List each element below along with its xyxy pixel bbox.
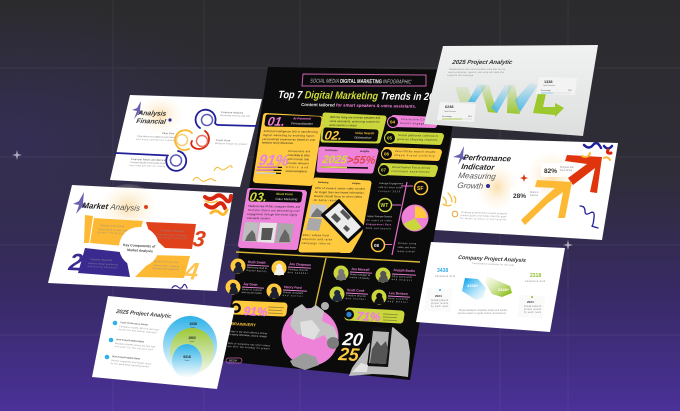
slide captions: Track inflows and outflows to plan ahead (137, 135, 176, 139)
slide: company project analysis: Performance summary for the year (472, 262, 514, 267)
block 3: red with digit: Evaluate rivals, strengths (157, 233, 188, 238)
poster footer text: Brainivery: 96% of marketers say short videos (228, 342, 271, 348)
timeline: statistics column: Engagement Rate (366, 223, 392, 226)
card 2024 (424, 288, 452, 312)
card 01: AI personalization: Consumers are (288, 149, 311, 153)
speaker Jay Dean: Jay Dean (243, 282, 258, 287)
card 2024: Annual review of (431, 299, 448, 302)
zigzag arrow chart (455, 83, 564, 117)
caption (458, 309, 508, 315)
gear red (191, 131, 209, 149)
description text: Tracking performance reveals progress (461, 211, 508, 215)
bullet list: Yearly Performance Market (120, 321, 149, 327)
block 4: yellow with digit: 4 (182, 258, 200, 286)
card: yellow engagement panel (301, 180, 369, 253)
trend pill 07: 07 (381, 168, 387, 173)
card: 2025 statistic: Insights (360, 150, 370, 153)
trend pill 04: Interactive Content (401, 117, 434, 122)
block 1: yellow with digit: Industry and Trends (100, 224, 125, 228)
stat 28% (510, 188, 540, 201)
trend pill 06: Zero-Clicks search results (395, 149, 436, 154)
stat 3438 (435, 268, 456, 278)
slide captions: Compare liquidity and leverage across (130, 161, 167, 165)
bullet list: Semi-Annual Analytics Market (112, 355, 141, 361)
slide captions: Financial Ratios and Metrics (131, 158, 166, 162)
card 01: AI personalization: 91% (257, 152, 290, 169)
speakers: right team (330, 266, 416, 304)
speaker Ruth Smith: Ruth Smith (248, 260, 266, 265)
card 01: AI personalization: digital marketing by enabling hyper- (263, 133, 316, 138)
speaker Scott Cook (330, 286, 368, 302)
card 2024 right: Annual review of (524, 305, 541, 308)
poster header pill: SOCIAL MEDIA DIGITAL MARKETING INFOGRAPHIC (310, 78, 412, 86)
trend pill 05: grow as shopping channels (397, 137, 438, 142)
trend pill 04: boosts engagement (400, 121, 433, 126)
year 2025 text: 20 (340, 329, 364, 350)
timeline: statistics column (365, 182, 428, 255)
block 3: red with digit (146, 222, 208, 252)
concentric rings chart: Sales (190, 327, 196, 329)
card 03: short form video marketing (241, 190, 304, 247)
speaker Jon Morcell: media company (349, 277, 370, 280)
poster footer text: Brainivery: MEDIA (229, 358, 237, 362)
block 2: navy with digit: 2 (66, 249, 85, 277)
speaker Henry Ford: Growth consultant (283, 291, 304, 295)
gear yellow (175, 130, 192, 150)
card 01: AI personalization (256, 115, 320, 183)
speaker Joseph Bartin: SEO specialist (392, 275, 413, 279)
concentric rings chart: Sales (189, 341, 195, 343)
card 2024: by each team (431, 305, 448, 308)
card 02: voice search optimization: Voice Search (355, 131, 375, 135)
bullet list: Review segments and target reach (111, 359, 152, 366)
timeline: statistics column: 2025 and beyond (365, 228, 391, 230)
year 2025 text: 25 (336, 344, 361, 365)
trend pill 06 (382, 148, 439, 160)
concentric rings chart: 1938 (189, 322, 197, 326)
stat card 1338: Total Revenue (543, 84, 555, 87)
poster footer text: Brainivery (226, 321, 271, 363)
card 2024 right: by each team (524, 311, 541, 314)
speaker Scott Cook: and founder (345, 297, 366, 301)
card: yellow engagement panel: Brands should focus on short videos (314, 194, 363, 199)
card 01: AI personalization: more likely to shop (287, 153, 310, 157)
card: yellow engagement panel: 80% of viewers retain video content (315, 186, 366, 191)
caption: Project analysis compares scope and results (459, 309, 508, 312)
decorative squiggles (443, 143, 612, 228)
timeline: statistics column: for users on video (366, 219, 393, 222)
green shape (485, 276, 512, 297)
slide title (136, 110, 172, 126)
timeline: statistics column: rate for short video (378, 186, 404, 189)
poster subtitle: Content tailored for smart speakers & voice assistants. (301, 102, 416, 109)
speaker Jon Chapman: Jon Chapman (289, 262, 311, 267)
slide title: 2025 Project Analytic (115, 309, 172, 320)
slide captions: reporting periods for clarity (129, 164, 166, 168)
speaker Joseph Bartin (376, 268, 416, 282)
bullet list: across the key market channels (118, 328, 158, 334)
block 4: yellow with digit: Stakeholders shaping (153, 264, 180, 268)
card 01: AI personalization: AI-Powered (293, 117, 311, 121)
decorative squiggles (193, 166, 232, 181)
speaker Lee Benson (372, 290, 410, 304)
poster: digital marketing infographic (222, 67, 462, 380)
stat card 6238: 54% (468, 116, 472, 118)
pie chart (402, 204, 428, 232)
concentric rings chart (163, 316, 217, 378)
timeline: statistics column: video see more (397, 246, 417, 249)
speaker Joseph Bartin: and analyst (391, 278, 412, 282)
slide title (457, 153, 512, 191)
speaker Scott Cook: Creative director (346, 294, 366, 298)
bullet list: Semi-Annual Analytics Market (116, 338, 145, 344)
block 4: yellow with digit (135, 255, 200, 286)
card: yellow engagement panel: Insights (352, 182, 361, 185)
stat 3438: Completed work (435, 275, 456, 278)
red growth arrow (565, 155, 602, 193)
block 4: yellow with digit: Market Forces and (154, 260, 179, 264)
card 01: AI personalization: behavior and preferences. (262, 141, 294, 145)
slide: 2025 project analytic (zigzag) (424, 45, 598, 136)
slide: company project analysis (416, 242, 565, 332)
card 03: short form video marketing: Platforms like TikTok, Instagram Reels, and (248, 204, 301, 209)
card 03: short form video marketing: Short Form (276, 192, 293, 196)
card 01: AI personalization: Personalization (291, 122, 314, 126)
speaker Ruth Smith: Marketing lead at (247, 266, 268, 270)
stat pill 71% (344, 309, 401, 324)
blue shape (462, 278, 486, 300)
stat pill 71%: 71% (356, 309, 382, 324)
bullet list (105, 321, 160, 368)
card 02: voice search optimization: Optimization (354, 136, 372, 140)
speaker Ruth Smith (230, 258, 269, 274)
stat pill 91%: 91% (243, 304, 269, 319)
stat card 6238: 6238 (445, 105, 453, 109)
slide description: used as lectures, reports, and more with data that (448, 71, 505, 74)
card: yellow engagement panel: attention and raise (302, 237, 333, 241)
gear flow diagram (116, 110, 257, 171)
slide captions: Profit Rate (216, 139, 231, 142)
card 03: short form video marketing: shareable content. (246, 216, 271, 220)
description text (452, 211, 508, 221)
slide title: Measuring (458, 171, 497, 181)
trend pill 05: 05 (387, 136, 393, 141)
slide: market analysis (48, 184, 233, 291)
card: 2025 statistic: 2025>55% (321, 154, 376, 167)
year 2025 text (336, 329, 364, 365)
poster footer text: Brainivery: for lasting information, Source: Google (228, 333, 267, 338)
card: yellow engagement panel: Short videos hold (302, 233, 329, 237)
timeline node third: 08 (374, 243, 380, 248)
block 3: red with digit: Competitive Landscape (160, 229, 185, 233)
stat 28%: 28% (513, 193, 526, 200)
slide: performance indicator (435, 138, 618, 240)
speaker Jon Morcell: Jon Morcell (351, 267, 370, 272)
card 02: voice search optimization: 02. (324, 129, 343, 143)
slide title: Growth (457, 181, 484, 191)
trend pill 06: shape brand visibility (394, 153, 435, 158)
slide captions: Cash Flow (162, 133, 175, 135)
speaker Ruth Smith: digital agency (246, 269, 268, 273)
icon: star logo (73, 192, 87, 214)
speakers: left team (226, 258, 311, 298)
stat 82%: been strong (560, 169, 573, 172)
concentric rings chart: Sales (184, 360, 190, 362)
block 3: red with digit: and market positions (156, 236, 188, 241)
yellow growth arrow (521, 180, 572, 225)
stat card 1338: 1338 (544, 80, 552, 84)
card: 2025 statistic (319, 149, 376, 171)
speaker Jon Chapman: and speaker (287, 271, 308, 275)
speaker Henry Ford: and author (282, 294, 303, 298)
slide captions: Measure margin by product (215, 142, 248, 146)
gear blue top (196, 110, 257, 128)
slide: analysis financial (110, 95, 262, 187)
card 02: voice search optimization: With the rising use of smart speakers and (330, 115, 381, 120)
slide title: Analysis (137, 110, 167, 118)
trend pill 06: 06 (384, 152, 390, 157)
stat 2318: Completed work (525, 280, 546, 283)
slide description: Presentations are communication tools that can be (449, 68, 506, 71)
stat 2318 (525, 273, 546, 283)
description text: for teams to focus on next quarter (460, 217, 507, 221)
block 2: navy with digit: and buying behaviors (87, 265, 119, 270)
card 01: AI personalization: with brands that (287, 157, 310, 161)
bullet list: for the upcoming reporting period (110, 362, 150, 368)
block 1: yellow with digit: growth and direction (97, 231, 129, 236)
timeline: statistics column: Brands using (398, 242, 417, 245)
stat 3438: 3438 (437, 268, 448, 274)
speaker Henry Ford (266, 284, 307, 298)
stat 2318: 2318 (530, 273, 541, 279)
section divider lines (236, 252, 420, 307)
team photo in pink circle (282, 302, 339, 370)
green shape: 2328+ (498, 287, 510, 292)
bullet list: Compare results with the last year (119, 325, 160, 332)
card 03: short form video marketing: engagement through bite-sized, highly (247, 212, 298, 217)
poster footer text: Brainivery: are their top strategy for growth (227, 345, 270, 351)
slide captions: Financial Analysis (221, 111, 244, 115)
poster footer text: Brainivery: BRAINIVERY (231, 321, 256, 327)
timeline: statistics column: Average Engagement (379, 182, 404, 185)
stat card 1338: Percentage (541, 89, 551, 92)
speaker Lee Benson: Data scientist (388, 297, 409, 301)
speaker Jay Dean: and social media (241, 292, 262, 295)
slide title: Perfromance (463, 153, 512, 163)
speaker Joseph Bartin: Joseph Bartin (393, 268, 415, 273)
speaker Jon Morcell: Brand manager at (350, 273, 371, 277)
card 03: short form video marketing: 03. (249, 190, 268, 204)
gear blue bottom (166, 151, 186, 171)
central circle label (119, 227, 159, 267)
stat 28%: Room to (530, 191, 539, 194)
concentric rings chart: 1902 (188, 336, 196, 340)
tablet image (322, 200, 364, 242)
caption: across teams to guide future investments (458, 312, 507, 315)
slide title: Indicator (461, 162, 496, 172)
block 2: navy with digit (66, 248, 130, 277)
stat 82% (541, 163, 574, 177)
block 1: yellow with digit: Understand market size, (98, 228, 129, 233)
trend pill 07: Omnichannel Focus drives (392, 165, 431, 170)
speaker Jay Dean: Head of content (242, 288, 263, 292)
poster title: Top 7 Digital Marketing Trends in 2025 (278, 89, 445, 104)
blue shape: 4328+ (467, 283, 479, 288)
block 1: yellow with digit (84, 215, 143, 246)
card: yellow engagement panel: far longer than text-based information. (314, 190, 365, 195)
speaker Henry Ford: Henry Ford (284, 285, 302, 290)
card 2024: 2024 (435, 294, 442, 298)
card 2024: project results (431, 302, 449, 305)
slide captions: and keep operations funded (136, 138, 175, 142)
speaker Lee Benson: Lee Benson (389, 291, 408, 296)
stat 28%: improve (530, 194, 539, 197)
stat 82%: 82% (544, 168, 557, 175)
block 4: yellow with digit: demand and regulation (152, 267, 180, 271)
slide: 2025 project analytic (rings) (92, 296, 235, 389)
card: yellow engagement panel: campaign returns. (301, 241, 332, 245)
slide captions: Reviewing revenue and cost (220, 114, 251, 118)
timeline: statistics column: leads overall (397, 250, 416, 253)
trend pill 05 (384, 132, 441, 144)
trend pill 05: Social platforms continue to (398, 133, 439, 138)
poster footer text: Brainivery: Video is the most effective format (229, 330, 268, 335)
card: yellow engagement panel: Marketing (318, 181, 329, 184)
block 2: navy with digit: Identify target audiences (88, 262, 119, 267)
icon: star logo (132, 101, 143, 119)
speaker Jon Chapman (272, 260, 311, 276)
card 02: voice search optimization (323, 115, 384, 143)
card: yellow engagement panel: for better results. (313, 198, 340, 202)
card 02: voice search optimization: voice assistants, optimizing content for (329, 119, 380, 124)
central circle label: Market Analysis (127, 248, 153, 253)
speaker Lee Benson: and mentor (387, 300, 408, 304)
bullet list: Measure growth across the first half (115, 342, 156, 349)
card 01: AI personalization: 01. (267, 115, 286, 129)
slide title: Market Analysis (82, 201, 141, 213)
central circle label: Key Components of (123, 243, 156, 249)
slide title: Financial (136, 118, 168, 126)
block 2: navy with digit: Customer Segments (90, 258, 113, 262)
card: 2025 statistic: TechVision (325, 149, 338, 152)
card 2024 right: 2024 (527, 300, 534, 304)
stat card 1338 (536, 77, 577, 95)
speaker Jon Morcell (334, 266, 372, 280)
description text: toward goals and helps identify gaps (460, 214, 508, 218)
trend pill 04 (388, 116, 436, 128)
card 01: AI personalization: recommendations. (285, 169, 308, 173)
concentric rings chart: 9318 (183, 355, 191, 359)
slide title: 2025 Project Analytic (451, 60, 513, 66)
trend pill 07 (378, 164, 435, 176)
timeline node SF: SF (417, 186, 423, 192)
speaker Scott Cook: Scott Cook (347, 288, 365, 293)
card 03: short form video marketing: Video Marketing (275, 197, 298, 201)
trend pill 07: consistent experiences (391, 169, 430, 174)
speaker Jon Chapman: Strategy director (288, 268, 308, 272)
hand holding phone (349, 327, 410, 377)
bullet list: and plan for the second half (114, 345, 153, 351)
card 01: AI personalization: personalized experiences based on user (262, 137, 316, 142)
card 2024 right: project results (524, 308, 542, 311)
timeline: statistics column: content 2025 (378, 190, 401, 193)
card 01: AI personalization: offers and (286, 165, 309, 169)
slide description (447, 68, 506, 77)
timeline node WT: WT (380, 203, 388, 209)
card 02: voice search optimization: voice search is critical. (329, 123, 358, 127)
card 03: short form video marketing: YouTube Shorts are dominating user (247, 208, 300, 213)
card 01: AI personalization: Artificial Intelligence (AI) is transforming (263, 129, 318, 134)
stat 82%: Progress has (560, 166, 574, 169)
card 2024 right (517, 295, 545, 318)
stat card 1338: 76% (568, 90, 572, 92)
wave decoration (172, 195, 231, 288)
slide title: Company Project Analysis (458, 255, 526, 264)
stat card 6238 (437, 102, 476, 122)
card 01: AI personalization: provide relevant (286, 161, 309, 165)
speaker Jay Dean (226, 280, 264, 295)
stat card 6238: Total Revenue (444, 110, 456, 113)
timeline: statistics column: Higher Time-per-Session (367, 215, 393, 218)
poster header pill (302, 74, 426, 86)
icon: red star (520, 174, 528, 182)
icon: star logo (453, 146, 467, 165)
stat card 6238: Percentage (442, 115, 452, 118)
stat pill 91% (231, 303, 284, 319)
trend pill 04: 04 (390, 120, 396, 125)
slide description: supports the message (447, 74, 474, 77)
block 3: red with digit: 3 (191, 226, 208, 252)
slide captions (129, 111, 251, 168)
